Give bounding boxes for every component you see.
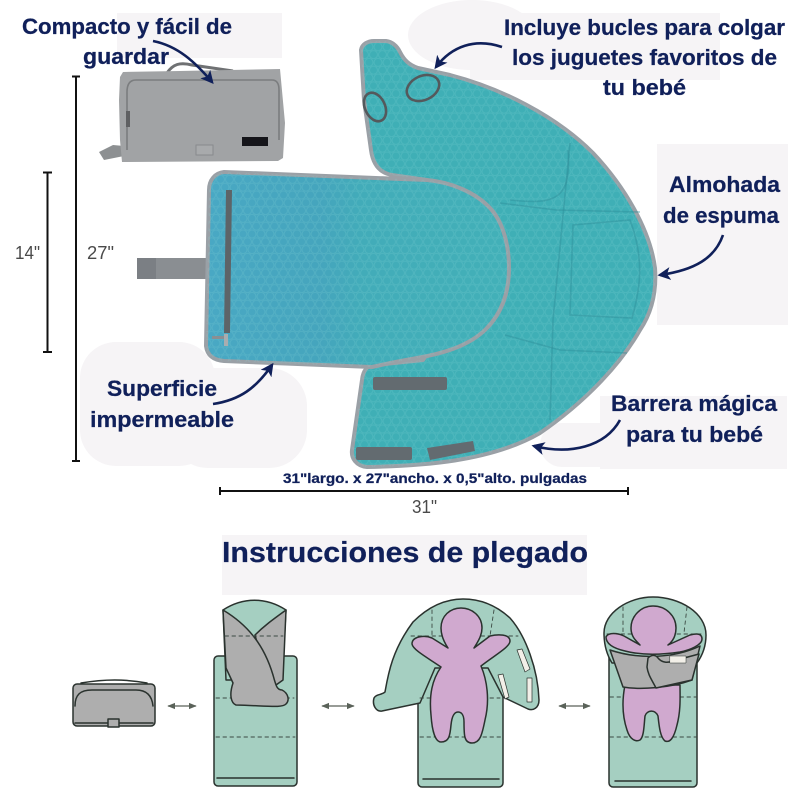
callout: bucles: tu bebé	[603, 75, 686, 100]
arrow: compacto	[153, 41, 212, 82]
background patch: compacto	[117, 13, 282, 58]
callout: compacto: guardar	[83, 44, 169, 69]
photo: folded bag	[99, 64, 285, 162]
bag handle	[167, 64, 233, 73]
callout: almohada: Almohada	[669, 172, 781, 197]
background patch: title	[222, 535, 587, 595]
background patch: bucles	[408, 0, 720, 80]
callout: compacto: Compacto y fácil de	[22, 14, 232, 39]
arrow: barrera	[534, 420, 620, 450]
panel zipper	[212, 190, 232, 346]
folding step 4: mat folded over baby	[604, 597, 706, 787]
dimension line 27	[72, 76, 80, 461]
dimensions text: 31"largo. x 27"ancho. x 0,5"alto. pulgadas	[283, 470, 587, 486]
background patch: almohada	[657, 144, 788, 325]
dimension line 14	[43, 172, 52, 352]
callout: superficie: Superficie	[107, 376, 217, 401]
bag side strap	[99, 145, 124, 160]
callout: bucles: los juguetes favoritos de	[512, 45, 777, 70]
bag zipper pull	[126, 111, 130, 127]
baby head and arms	[606, 606, 702, 654]
callout: superficie	[90, 376, 234, 432]
arrow: bucles	[436, 43, 502, 67]
label 14: 14"	[15, 243, 40, 263]
folding step 1: folded bag	[73, 680, 155, 727]
callout: barrera: Barrera mágica	[611, 391, 778, 416]
callout: bucles	[504, 15, 785, 100]
photo: open changing mat	[137, 41, 655, 467]
velcro strips	[356, 377, 475, 460]
callout: superficie: impermeable	[90, 407, 234, 432]
callout: bucles: Incluye bucles para colgar	[504, 15, 785, 40]
label 31: 31"	[412, 497, 437, 517]
callout: barrera	[611, 391, 778, 447]
folding step 3: open mat with baby	[373, 599, 539, 787]
bag logo label	[242, 137, 268, 146]
callout: almohada: de espuma	[663, 203, 780, 228]
arrow: step 1 to 2	[168, 705, 196, 707]
arrow: almohada	[660, 235, 723, 275]
mat fold lines	[500, 143, 640, 420]
velcro strips	[498, 649, 532, 702]
bag body	[119, 69, 285, 162]
bag tab	[196, 145, 213, 155]
dimension line 31	[220, 487, 628, 495]
callout: barrera: para tu bebé	[626, 422, 763, 447]
fold-out panel	[206, 172, 509, 367]
baby figure	[412, 608, 510, 743]
bag pocket seam	[127, 80, 279, 150]
arrow: step 3 to 4	[559, 705, 590, 707]
arrow: superficie	[213, 365, 272, 404]
mat strap	[137, 258, 211, 279]
folding step 2: half folded mat	[214, 600, 297, 786]
gray flap	[647, 654, 699, 688]
callout: almohada	[663, 172, 781, 228]
callout: compacto	[22, 14, 232, 69]
title: Instrucciones de plegado	[222, 537, 588, 569]
mat main body	[352, 41, 655, 467]
toy loops	[360, 70, 443, 125]
label 27: 27"	[87, 243, 114, 263]
background patch: superficie	[80, 342, 307, 468]
gray band	[610, 646, 700, 688]
background patch: barrera	[540, 396, 787, 469]
arrow: step 2 to 3	[322, 705, 354, 707]
baby body	[623, 685, 680, 741]
